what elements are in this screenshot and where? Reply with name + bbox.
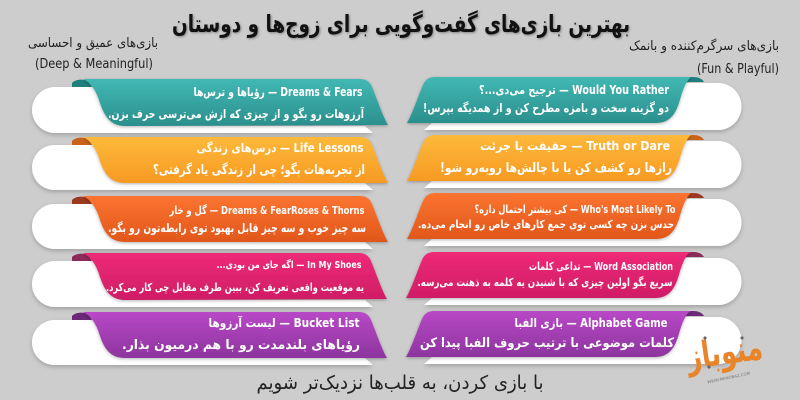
card: Would You Rather: [407, 77, 742, 130]
heading: fun and playful: (Fun & Playful): [697, 62, 779, 77]
card: Who's Most Likely To: Who's Most Likely To — کی بیشتر احتمال داره؟: [474, 203, 676, 216]
logo: WWW.MENOBAZ.COM: [707, 370, 751, 385]
card: Dreams and Fears: آرزوهات رو بگو و از چیزی که ازش می‌ترسی حرف بزن.: [108, 106, 365, 122]
card: Bucket List: Bucket List — لیست آرزوها: [208, 315, 360, 331]
card: Who's Most Likely To: حدس بزن چه کسی توی جمع کارهای خاص رو انجام می‌ده.: [418, 218, 674, 231]
panel: fun games column: [406, 77, 742, 364]
card: Alphabet Game: کلمات موضوعی با ترتیب حروف الفبا پیدا کن: [420, 336, 674, 351]
heading: deep and meaningful: بازی‌های عمیق و احساسی: [28, 36, 158, 51]
title: بهترین بازی‌های گفت‌وگویی برای زوج‌ها و دوستان: [172, 10, 630, 38]
card: Word Association: سریع بگو اولین چیزی که با شنیدن یه کلمه به ذهنت می‌رسه.: [418, 276, 672, 289]
card: Alphabet Game: Alphabet Game — بازی الفبا: [514, 316, 668, 330]
card: Would You Rather: Would You Rather — ترجیح می‌دی...؟: [479, 83, 669, 97]
card: Alphabet Game: [406, 311, 742, 364]
card: Dreams and Fears: Dreams & Fears — رؤیاها و ترس‌ها: [194, 85, 362, 100]
card: Roses and Thorns: [32, 196, 388, 249]
card: Who's Most Likely To: [407, 193, 742, 246]
card: Roses and Thorns: سه چیز خوب و سه چیز قابل بهبود توی رابطه‌تون رو بگو.: [108, 221, 366, 236]
logo: [683, 327, 765, 385]
card: Would You Rather: دو گزینه سخت و بامزه مطرح کن و از همدیگه بپرس!: [423, 101, 669, 116]
heading: deep and meaningful: (Deep & Meaningful): [35, 57, 153, 72]
heading: fun and playful: [629, 38, 779, 77]
panel: deep games column: [32, 79, 388, 365]
card: Bucket List: [32, 312, 387, 365]
card: Truth or Dare: Truth or Dare — حقیقت یا جرئت: [480, 139, 670, 153]
card: Truth or Dare: [407, 135, 742, 188]
heading: deep and meaningful: [28, 36, 158, 72]
logo: منوباز: [683, 327, 765, 378]
card: Life Lessons: Life Lessons — درس‌های زندگی: [196, 141, 364, 155]
card: In My Shoes: In My Shoes — اگه جای من بودی...: [216, 258, 362, 271]
card: In My Shoes: [32, 253, 387, 307]
card: Life Lessons: [32, 137, 388, 190]
card: Life Lessons: از تجربه‌هات بگو؛ چی از زندگی یاد گرفتی؟: [153, 162, 365, 178]
card: Truth or Dare: رازها رو کشف کن یا با چالش‌ها روبه‌رو شو!: [440, 161, 672, 176]
card: In My Shoes: یه موقعیت واقعی تعریف کن، ببین طرف مقابل چی کار می‌کرد.: [106, 281, 364, 294]
card: Bucket List: رؤیاهای بلندمدت رو با هم درمیون بذار.: [122, 338, 360, 353]
card: Word Association: [406, 252, 742, 305]
card: Roses and Thorns: Dreams & FearRoses & Thorns — گل و خار: [169, 204, 365, 217]
heading: fun and playful: بازی‌های سرگرم‌کننده و بانمک: [629, 38, 779, 54]
card: Dreams and Fears: [32, 79, 388, 133]
card: Word Association: Word Association — تداعی کلمات: [529, 260, 673, 273]
footer tagline: با بازی کردن، به قلب‌ها نزدیک‌تر شویم: [256, 372, 544, 394]
